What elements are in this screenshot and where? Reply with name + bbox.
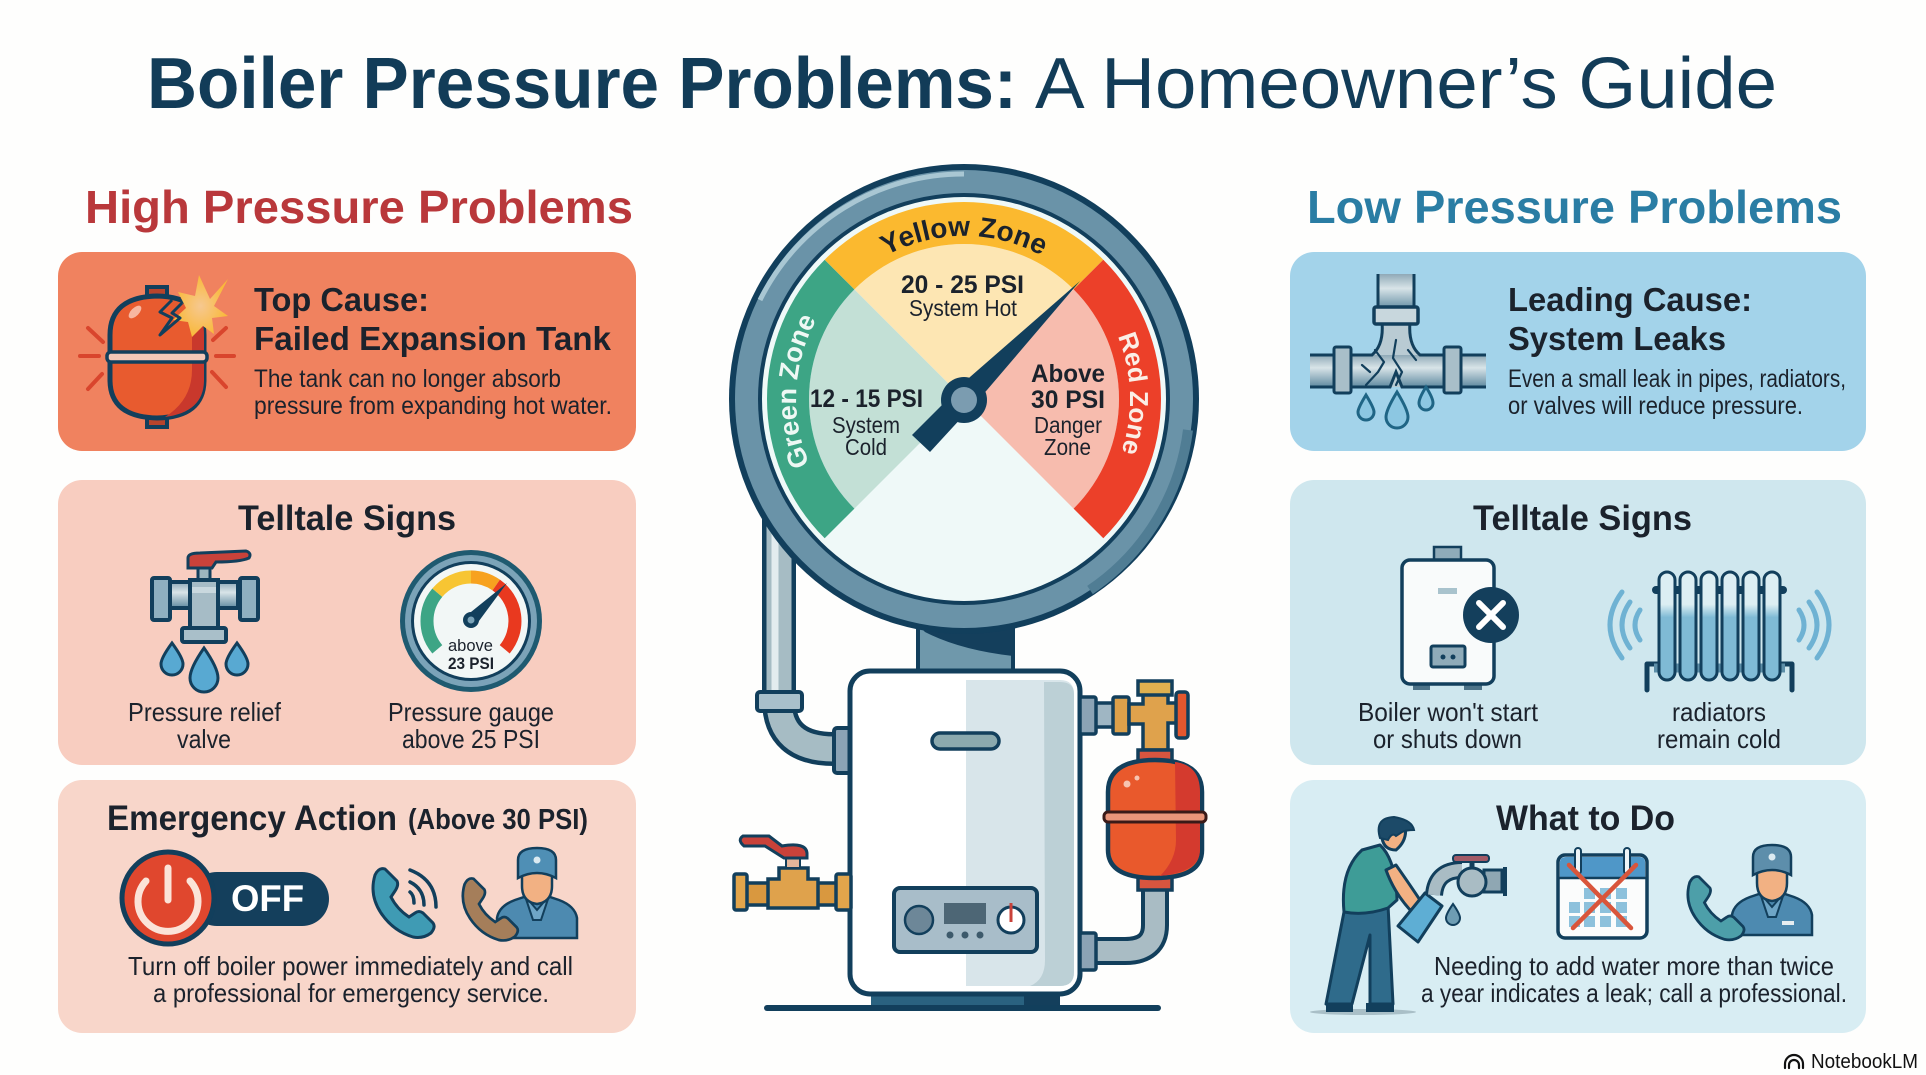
text: what to do instructions: a year indicates a leak; call a professional. [1421,978,1847,1008]
gauge face: yellow zone [824,202,1104,384]
pipe: right brass fitting [1080,681,1188,750]
heading: telltale signs: Telltale Signs [238,499,456,538]
icon: technician on phone [463,848,577,940]
title: A Homeowner’s Guide [1035,44,1777,124]
gauge face: green zone: 12 - 15 PSI [810,385,923,413]
text: top cause description: The tank can no longer absorb [254,365,561,393]
label: pressure relief valve: Pressure relief [128,697,282,727]
label: pressure gauge above 25 psi [388,697,554,754]
label: pressure relief valve [128,697,282,754]
icon: water tap [1434,855,1507,925]
heading: telltale signs: Telltale Signs [1473,499,1692,538]
icon: small pressure gauge: above [448,636,493,655]
icon: power off switch [122,852,329,944]
label: radiators remain cold: remain cold [1657,724,1781,754]
icon: power off switch: OFF [231,878,304,919]
icon: boiler with x mark [1402,547,1519,690]
panel: emergency action [58,780,636,1033]
text: emergency instructions [128,951,573,1008]
text: top cause heading: Failed Expansion Tank [254,320,612,357]
icon: phone ringing [373,869,436,938]
gauge face: red zone: Zone [1044,434,1091,460]
neck: gauge stem [918,615,1013,673]
icon: calendar crossed out [1558,848,1647,938]
heading: what to do: What to Do [1496,799,1675,838]
icon: cold radiator [1610,572,1829,690]
gauge face: green zone: Green Zone [779,316,814,468]
pipe: gauge to boiler, left side [757,510,852,773]
heading: high pressure problems: High Pressure Problems [85,181,633,233]
label: boiler won't start: or shuts down [1373,724,1522,754]
text: leading cause heading: Leading Cause: [1508,281,1752,318]
panel: leading cause system leaks [1290,252,1866,451]
panel: low pressure telltale signs [1290,480,1866,765]
panel: what to do [1290,780,1866,1033]
gauge face: red zone: 30 PSI [1031,386,1105,414]
gauge face: red zone: Above [1031,360,1105,388]
text: top cause heading: Top Cause: [254,281,429,318]
icon: technician on phone [1688,845,1812,940]
boiler body [764,671,1161,1011]
label: pressure gauge above 25 psi: above 25 PSI [402,724,540,754]
valve: left brass drain valve [734,836,851,910]
text: leading cause description: or valves will reduce pressure. [1508,392,1803,420]
label: pressure relief valve: valve [177,724,231,754]
gauge face: green zone [767,260,948,538]
title: Boiler Pressure Problems: [147,44,1017,124]
gauge dial [729,164,1199,630]
panel: top cause failed expansion tank [58,252,636,451]
text: top cause heading [254,281,612,357]
label: radiators remain cold: radiators [1672,697,1766,727]
icon: burst expansion tank [80,275,234,427]
label: pressure gauge above 25 psi: Pressure gauge [388,697,554,727]
icon: small pressure gauge [400,550,542,692]
title [147,44,1777,124]
gauge face: yellow zone: 20 - 25 PSI [901,271,1024,299]
text: top cause description: pressure from expanding hot water. [254,392,612,420]
gauge face: red zone: Danger [1034,412,1102,438]
text: top cause description [254,365,612,420]
gauge face: red zone: Red Zone [1118,332,1148,454]
heading: emergency action: Emergency Action [107,799,397,838]
gauge face: green zone: Cold [845,434,887,460]
gauge face: yellow zone: System Hot [909,295,1018,321]
text: what to do instructions: Needing to add water more than twice [1434,951,1834,981]
text: leading cause description [1508,365,1846,420]
text: leading cause description: Even a small leak in pipes, radiators, [1508,365,1846,393]
icon: cracked pipe with drips [1310,274,1486,428]
gauge needle [912,281,1080,452]
text: leading cause heading [1508,281,1752,357]
gauge face: red zone [980,260,1161,538]
icon: person filling water at tap [1310,817,1442,1015]
icon: leaking relief valve [152,551,258,692]
label: boiler won't start [1358,697,1539,754]
text: emergency instructions: Turn off boiler power immediately and call [128,951,573,981]
icon: small pressure gauge: 23 PSI [448,654,494,673]
boiler control panel [894,888,1037,952]
label: radiators remain cold [1657,697,1781,754]
gauge face: yellow zone: Yellow Zone [878,217,1046,254]
text: what to do instructions [1421,951,1847,1008]
boiler handle [932,733,999,749]
heading: low pressure problems: Low Pressure Problems [1307,181,1842,233]
expansion tank [1080,750,1206,970]
heading: emergency action: (Above 30 PSI) [408,804,588,836]
text: leading cause heading: System Leaks [1508,320,1726,357]
heading: emergency action [107,799,588,838]
panel: high pressure telltale signs [58,480,636,765]
watermark: notebooklm: NotebookLM [1811,1051,1918,1073]
gauge face: green zone: System [832,412,900,438]
label: boiler won't start: Boiler won't start [1358,697,1539,727]
central gauge and boiler [729,164,1208,1011]
text: emergency instructions: a professional for emergency service. [153,978,549,1008]
